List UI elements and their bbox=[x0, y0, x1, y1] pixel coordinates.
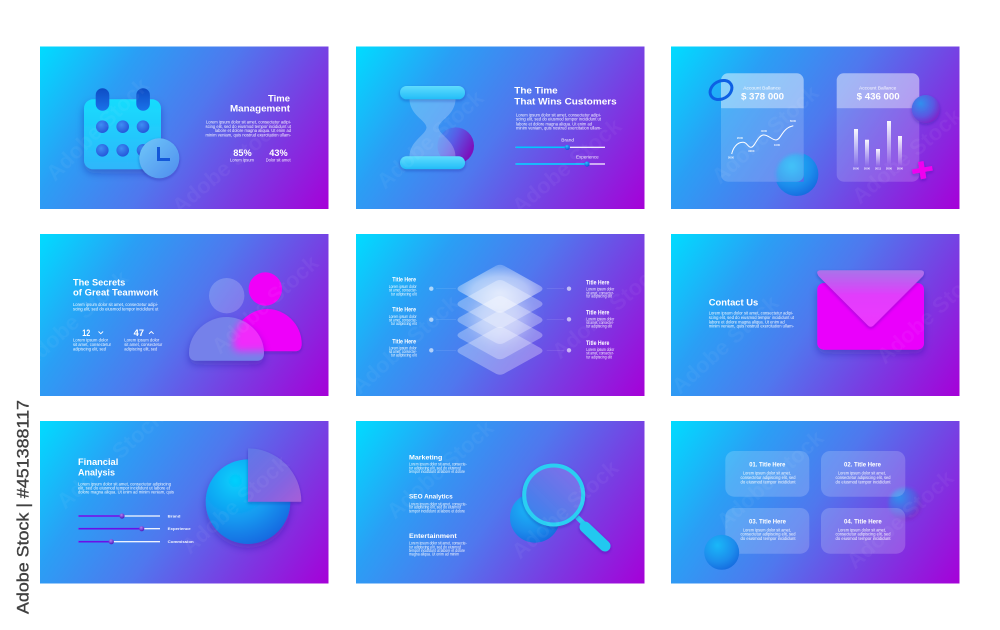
label: left title 2: Lorem ipsum dolor bbox=[389, 314, 417, 319]
bar chart bbox=[853, 121, 904, 171]
watermarks: Adobe Stock bbox=[707, 80, 824, 189]
text block: description bbox=[73, 302, 159, 311]
stat: 12 down: Lorem ipsum dolor bbox=[73, 338, 109, 343]
card: 04 title here: 04. Title Here bbox=[844, 518, 882, 525]
icon: stacked glass layers bbox=[458, 265, 542, 375]
card: 02 title here bbox=[821, 451, 905, 497]
label: right title 1 bbox=[547, 280, 615, 299]
line chart: 4000 bbox=[761, 129, 768, 133]
text block: entertainment: tempor incididunt ut labore et dolore bbox=[409, 548, 466, 553]
heading: the time that wins customers: That Wins Customers bbox=[514, 97, 617, 108]
decoration: blue sphere bbox=[775, 153, 818, 196]
panel: account balance bbox=[671, 46, 960, 209]
text block: description: Lorem ipsum dolor sit amet, consectetur adipi- bbox=[206, 120, 292, 125]
watermarks: Adobe Stock bbox=[207, 250, 324, 359]
stat: 43%: 43% bbox=[269, 148, 288, 158]
card: account balance 378 000 bbox=[721, 73, 804, 182]
text block: description: minim veniam, quis nostrud exercitation ullam- bbox=[206, 133, 292, 138]
label: right title 2: tur adipiscing elit bbox=[586, 323, 613, 328]
stat: 12 down bbox=[73, 328, 112, 351]
bar chart: 2000 bbox=[853, 167, 860, 171]
text block: description: Lorem ipsum dolor sit amet, consectetur adipi- bbox=[73, 302, 159, 307]
label: left title 1 bbox=[389, 277, 456, 296]
card: 04 title here: do eiusmod tempor incididunt bbox=[836, 536, 891, 541]
label: right title 1: tur adipiscing elit bbox=[586, 294, 613, 299]
label: left title 3: Lorem ipsum dolor bbox=[389, 346, 417, 351]
label: right title 3: sit amet, consecter- bbox=[586, 351, 614, 356]
label: right title 1: Lorem ipsum dolor bbox=[586, 287, 615, 292]
bar chart: 2000 bbox=[897, 167, 904, 171]
text block: description: elit, sed do eiusmod tempor incididunt ut labore et bbox=[78, 485, 171, 490]
line chart: 1000 bbox=[774, 143, 781, 147]
panel: contact us bbox=[671, 234, 960, 396]
stat: 12 down: sit amet, consectetur bbox=[73, 342, 112, 347]
text block: description: dolore magna aliqua. Ut enim ad minim veniam, quis bbox=[78, 490, 174, 495]
decoration: blue ring bbox=[707, 77, 735, 103]
watermarks: Adobe Stock bbox=[52, 405, 169, 514]
card: 03 title here bbox=[725, 508, 809, 554]
card: 04 title here bbox=[821, 508, 905, 554]
heading: contact us: Contact Us bbox=[709, 297, 758, 308]
text block: seo analytics: tur adipiscing elit, sed do eiusmod bbox=[409, 505, 462, 510]
panel: marketing seo entertainment bbox=[356, 421, 644, 584]
label: right title 3: Lorem ipsum dolor bbox=[586, 347, 615, 352]
decoration: purple sphere bbox=[912, 95, 940, 123]
stat: 12 down: adipiscing elit, sed bbox=[73, 346, 107, 351]
label: left title 2: Title Here bbox=[392, 307, 416, 314]
heading: the secrets of great teamwork: The Secrets bbox=[73, 277, 125, 288]
stat: 12 down: 12 bbox=[82, 328, 90, 338]
panel: layered titles bbox=[356, 234, 644, 396]
text block: marketing: Marketing bbox=[409, 454, 443, 461]
text block: description bbox=[78, 481, 174, 495]
label: right title 3: tur adipiscing elit bbox=[586, 354, 613, 359]
text block: description: labore et dolore magna aliqua. Ut enim ad bbox=[215, 128, 292, 133]
card: 01 title here bbox=[725, 451, 809, 497]
label: right title 2: sit amet, consecter- bbox=[586, 320, 614, 325]
card: 03 title here: 03. Title Here bbox=[749, 518, 787, 525]
slider: brand bbox=[516, 137, 605, 150]
label: left title 1: Title Here bbox=[392, 277, 416, 284]
text block: description: scing elit, sed do eiusmod tempor incididunt ut bbox=[516, 117, 602, 122]
watermarks: Adobe Stock bbox=[17, 265, 134, 374]
card: 01 title here: 01. Title Here bbox=[749, 462, 786, 469]
card: account balance 436 000: Account Ballance bbox=[859, 85, 897, 90]
heading: financial analysis: Financial bbox=[78, 457, 118, 468]
text block: marketing: tempor incididunt ut labore et dolore bbox=[409, 469, 466, 474]
bar chart: 2000 bbox=[886, 167, 893, 171]
label: right title 1: sit amet, consecter- bbox=[586, 290, 614, 295]
text block: description: Lorem ipsum dolor sit amet, consectetur adipi- bbox=[709, 311, 794, 316]
stat: 85%: Lorem ipsum bbox=[230, 157, 255, 162]
panel: the time that wins customers bbox=[356, 46, 644, 209]
heading: financial analysis bbox=[78, 457, 118, 478]
text block: entertainment bbox=[409, 533, 467, 557]
watermarks: Adobe Stock bbox=[347, 290, 464, 399]
stat: 43% bbox=[266, 148, 291, 162]
watermarks: Adobe Stock bbox=[842, 465, 959, 574]
label: left title 3 bbox=[389, 338, 456, 358]
stat: 47 up: sit amet, consectetur bbox=[124, 342, 163, 347]
text block: description: minim veniam, quis nostrud exercitation ullam- bbox=[516, 125, 602, 130]
text block: entertainment: Lorem ipsum dolor sit amet, consecte- bbox=[409, 541, 467, 546]
label: left title 1: sit amet, consecter- bbox=[389, 288, 417, 293]
card: 02 title here: consectetur adipiscing elit, sed bbox=[836, 475, 891, 480]
panel: the secrets of great teamwork bbox=[40, 234, 328, 396]
card: 02 title here: 02. Title Here bbox=[844, 462, 882, 469]
label: left title 2: tur adipiscing elit bbox=[391, 321, 417, 326]
card: 02 title here: do eiusmod tempor incididunt bbox=[836, 479, 891, 484]
card: account balance 378 000: Account Ballance bbox=[743, 85, 781, 90]
text block: description: minim veniam, quis nostrud exercitation ullam- bbox=[709, 324, 795, 329]
watermarks: Adobe Stock bbox=[507, 113, 627, 219]
slider: commission: Commission bbox=[168, 539, 194, 544]
card: 04 title here: consectetur adipiscing elit, sed bbox=[836, 532, 891, 537]
label: left title 1: tur adipiscing elit bbox=[391, 291, 417, 296]
line chart: 5000 bbox=[728, 156, 735, 160]
text block: description: scing elit, sed do eiusmod tempor incididunt ut bbox=[709, 315, 795, 320]
text block: description: scing elit, sed do eiusmod tempor incididunt ut bbox=[73, 306, 159, 311]
slider: experience: Experience bbox=[576, 155, 599, 160]
label: right title 3: Title Here bbox=[586, 340, 610, 347]
card: 03 title here: do eiusmod tempor incididunt bbox=[740, 536, 796, 541]
card: account balance 436 000 bbox=[837, 73, 919, 182]
icon: two people bbox=[189, 272, 302, 361]
label: right title 3 bbox=[547, 340, 615, 359]
decoration: blue sphere bbox=[704, 535, 739, 570]
text block: description: scing elit, sed do eiusmod tempor incididunt ut bbox=[206, 124, 292, 129]
text block: description: Lorem ipsum dolor sit amet, consectetur adipi- bbox=[516, 113, 602, 118]
label: right title 2: Title Here bbox=[586, 309, 610, 316]
watermarks: Adobe Stock bbox=[167, 113, 287, 219]
slider: commission bbox=[78, 539, 194, 544]
label: right title 2: Lorem ipsum dolor bbox=[586, 316, 615, 321]
line chart: 2000 bbox=[737, 136, 744, 140]
card: 01 title here: consectetur adipiscing elit, sed bbox=[740, 475, 796, 480]
text block: description: labore et dolore magna aliqua. Ut enim ad bbox=[516, 121, 593, 126]
card: 04 title here: Lorem ipsum dolor sit amet, bbox=[838, 527, 886, 532]
card: 02 title here: Lorem ipsum dolor sit amet, bbox=[838, 471, 886, 476]
panel: financial analysis bbox=[40, 421, 328, 584]
label: right title 1: Title Here bbox=[586, 280, 610, 287]
slider: brand: Brand bbox=[168, 513, 181, 518]
card: 03 title here: consectetur adipiscing elit, sed bbox=[740, 532, 796, 537]
bar chart: 2000 bbox=[864, 167, 871, 171]
text block: marketing: tur adipiscing elit, sed do eiusmod bbox=[409, 465, 462, 470]
text block: description bbox=[709, 311, 795, 329]
stat: 47 up: 47 bbox=[134, 328, 144, 338]
heading: time management: Time bbox=[268, 94, 290, 105]
label: left title 3: Title Here bbox=[392, 338, 416, 345]
text block: entertainment: Entertainment bbox=[409, 533, 457, 540]
line chart: 5000 bbox=[790, 119, 797, 123]
icon: hourglass bbox=[400, 86, 474, 169]
watermarks: Adobe Stock bbox=[177, 450, 294, 559]
text block: description bbox=[206, 120, 292, 138]
text block: entertainment: tur adipiscing elit, sed do eiusmod bbox=[409, 544, 462, 549]
text block: seo analytics: Lorem ipsum dolor sit amet, consecte- bbox=[409, 501, 467, 506]
decoration: purple sphere bbox=[888, 487, 922, 521]
line chart bbox=[728, 119, 797, 160]
stat: 85%: 85% bbox=[233, 148, 252, 158]
decoration: magenta plus bbox=[912, 161, 933, 179]
slider: brand bbox=[78, 513, 181, 519]
watermarks: Adobe Stock bbox=[382, 415, 499, 524]
panel: time management bbox=[40, 46, 328, 209]
stat: 43%: Dolor sit amet bbox=[266, 157, 291, 162]
watermarks: Adobe Stock bbox=[41, 72, 154, 186]
text block: marketing bbox=[409, 454, 467, 474]
label: left title 1: Lorem ipsum dolor bbox=[389, 284, 417, 289]
label: left title 3: sit amet, consecter- bbox=[389, 349, 417, 354]
heading: the secrets of great teamwork bbox=[73, 277, 159, 299]
text block: description bbox=[516, 113, 602, 130]
card: 01 title here: Lorem ipsum dolor sit amet, bbox=[743, 471, 791, 476]
watermarks: Adobe Stock bbox=[372, 85, 489, 194]
card: account balance 378 000: $ 378 000 bbox=[741, 91, 784, 101]
heading: the secrets of great teamwork: of Great Teamwork bbox=[73, 288, 159, 299]
label: left title 2: sit amet, consecter- bbox=[389, 317, 417, 322]
watermarks: Adobe Stock bbox=[507, 455, 624, 564]
icon: magnifying glass bbox=[510, 466, 605, 546]
watermarks: Adobe Stock bbox=[712, 425, 829, 534]
slider: brand: Brand bbox=[561, 137, 575, 142]
label: left title 3: tur adipiscing elit bbox=[391, 353, 417, 358]
heading: the time that wins customers bbox=[514, 86, 617, 108]
heading: financial analysis: Analysis bbox=[78, 467, 115, 478]
watermarks: Adobe Stock bbox=[547, 258, 667, 364]
stat: 47 up: Lorem ipsum dolor bbox=[124, 338, 160, 343]
label: left title 2 bbox=[389, 307, 456, 326]
text block: seo analytics: SEO Analytics bbox=[409, 494, 453, 501]
heading: time management: Management bbox=[230, 104, 291, 115]
slider: experience: Experience bbox=[168, 526, 192, 531]
label: right title 2 bbox=[547, 309, 615, 328]
card: 03 title here: Lorem ipsum dolor sit amet, bbox=[743, 527, 791, 532]
stat: 85% bbox=[230, 148, 255, 162]
watermarks: Adobe Stock bbox=[667, 290, 784, 399]
text block: entertainment: magna aliqua. Ut enim ad minim bbox=[409, 552, 459, 557]
stat: 47 up: adipiscing elit, sed bbox=[124, 346, 158, 351]
bar chart: 2011 bbox=[875, 167, 881, 171]
icon: calendar with clock bbox=[84, 88, 179, 178]
chart: pie sphere with wedge bbox=[206, 448, 301, 544]
icon: envelope bbox=[817, 270, 924, 350]
line chart: 3000 bbox=[748, 149, 755, 153]
slider: experience bbox=[516, 155, 605, 167]
text block: marketing: Lorem ipsum dolor sit amet, consecte- bbox=[409, 462, 467, 467]
watermarks: Adobe Stock bbox=[872, 260, 989, 369]
stat: 47 up bbox=[124, 328, 163, 351]
text block: description: Lorem ipsum dolor sit amet, consectetur adipiscing bbox=[78, 481, 172, 486]
text block: seo analytics: tempor incididunt ut labore et dolore bbox=[409, 508, 466, 513]
text block: description: labore et dolore magna aliqua. Ut enim ad bbox=[709, 319, 785, 324]
heading: time management bbox=[230, 94, 291, 115]
card: 01 title here: do eiusmod tempor incididunt bbox=[740, 479, 796, 484]
watermarks bbox=[17, 72, 989, 574]
card: account balance 436 000: $ 436 000 bbox=[857, 91, 900, 101]
text block: seo analytics bbox=[409, 494, 467, 513]
heading: the time that wins customers: The Time bbox=[514, 86, 558, 97]
watermarks: Adobe Stock bbox=[847, 103, 967, 209]
slider: experience bbox=[78, 526, 192, 531]
panel: four title cards bbox=[671, 421, 960, 584]
credit: adobe stock id: Adobe Stock | #451388117 bbox=[14, 400, 32, 614]
